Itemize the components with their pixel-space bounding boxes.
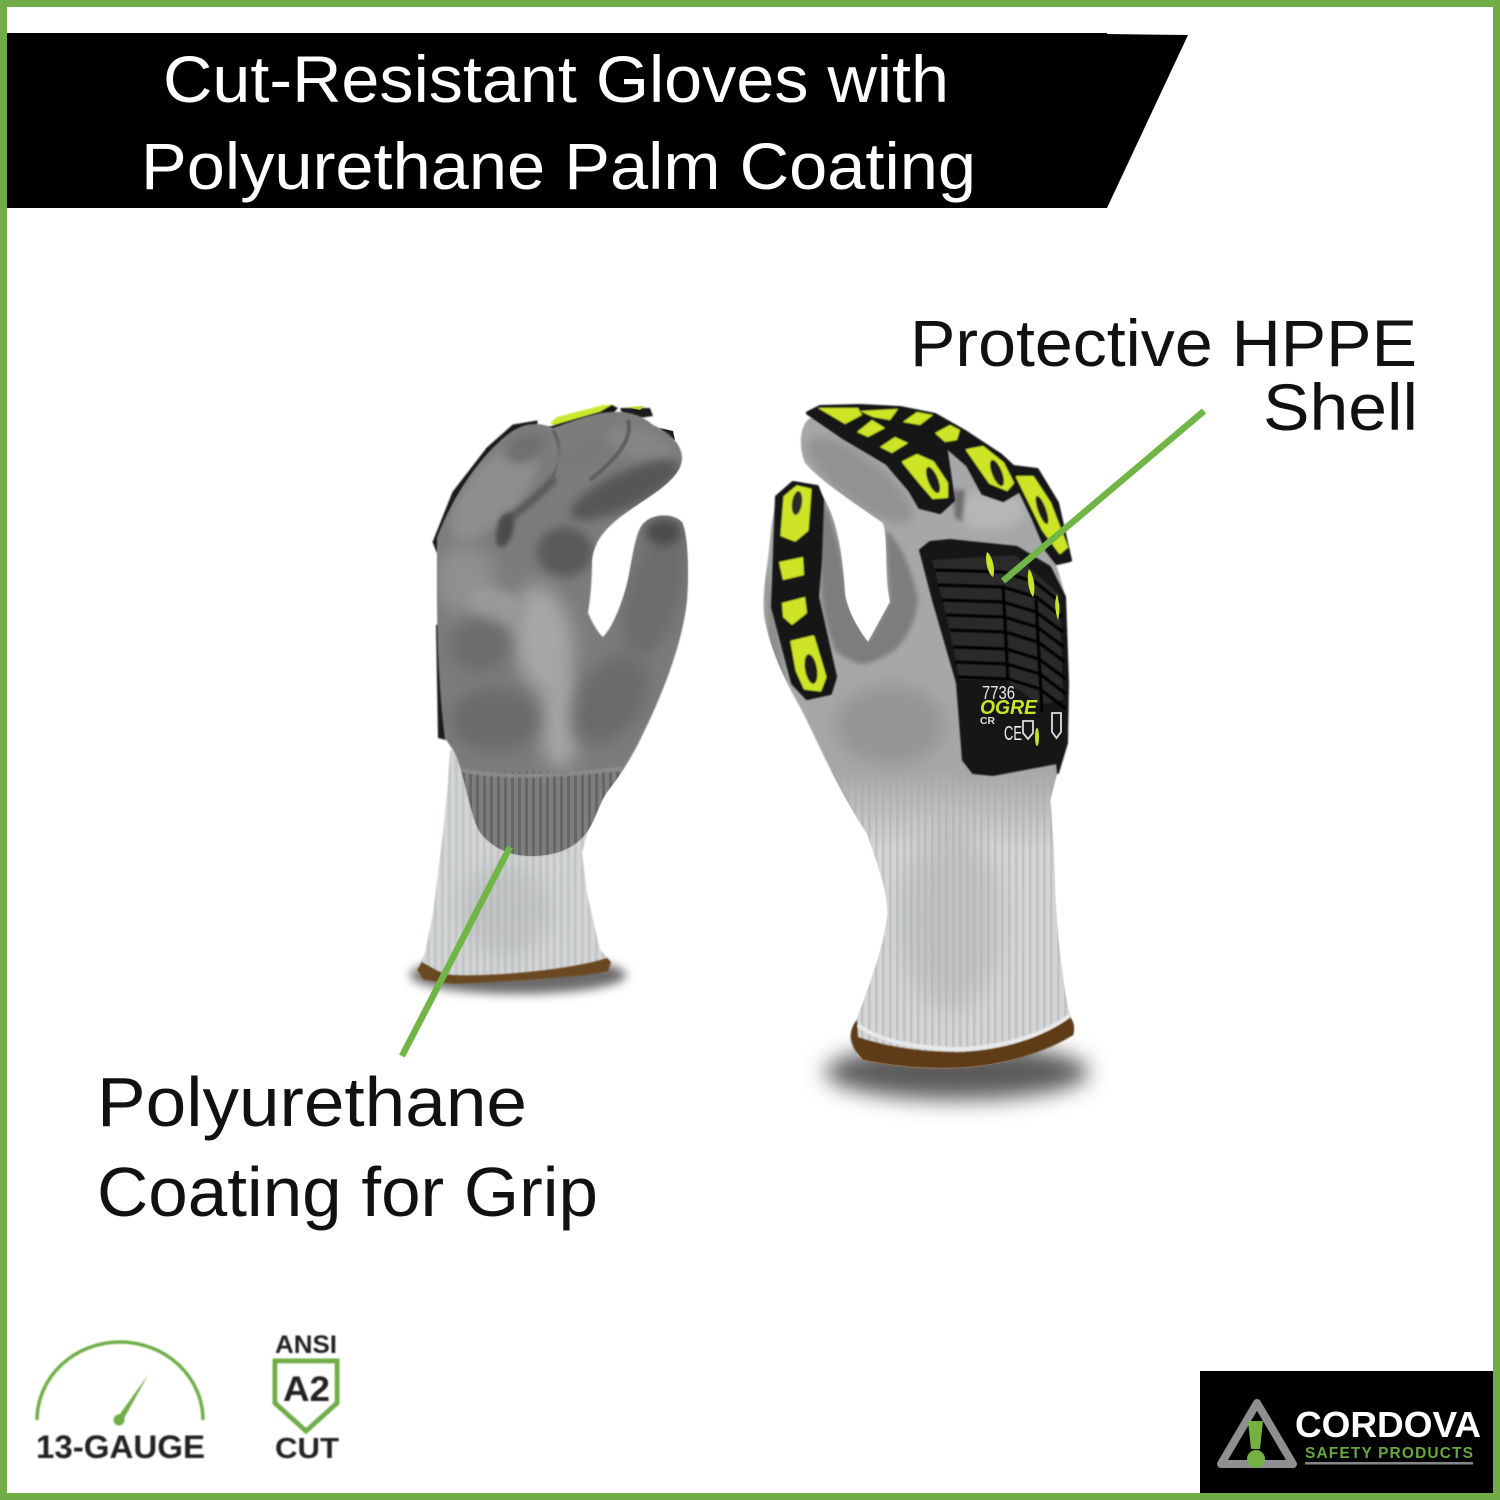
thumb guard [773,483,835,698]
logo: Cordova Safety Products: SAFETY PRODUCTS [1305,1445,1473,1462]
title banner: Polyurethane Palm Coating [141,129,976,203]
callout label: protective HPPE shell [910,306,1418,444]
icon: ANSI A2 cut shield [275,1331,339,1465]
right glove: back view with impact guards [764,406,1090,1100]
callout label: protective HPPE shell: Shell [1263,370,1418,444]
knuckle guard panel [920,540,1068,775]
callout label: polyurethane coating for grip: Coating for Grip [97,1153,598,1231]
logo: Cordova Safety Products [1200,1371,1494,1493]
knuckle guard panel: CR [980,716,996,727]
icon: ANSI A2 cut shield: CUT [275,1433,339,1465]
icon: 13-gauge dial: 13-GAUGE [36,1429,205,1465]
knuckle guard panel: CE [1004,723,1022,745]
callout label: polyurethane coating for grip [97,1063,598,1231]
logo: Cordova Safety Products: CORDOVA [1295,1404,1481,1445]
knuckle guard panel: 7736 [982,683,1015,703]
callout label: protective HPPE shell: Protective HPPE [910,306,1417,380]
callout line: HPPE shell [1003,411,1204,581]
knuckle guard panel: OGRE [980,697,1038,719]
icon: ANSI A2 cut shield: A2 [283,1370,330,1409]
callout label: polyurethane coating for grip: Polyurethane [97,1063,527,1141]
icon: ANSI A2 cut shield: ANSI [275,1331,337,1359]
left glove: palm view [410,405,700,994]
title banner: Cut-Resistant Gloves with [163,42,949,116]
callout line: polyurethane coating [402,847,510,1056]
finger guards [808,406,1070,563]
title banner [7,33,1188,208]
icon: 13-gauge dial [36,1342,205,1465]
